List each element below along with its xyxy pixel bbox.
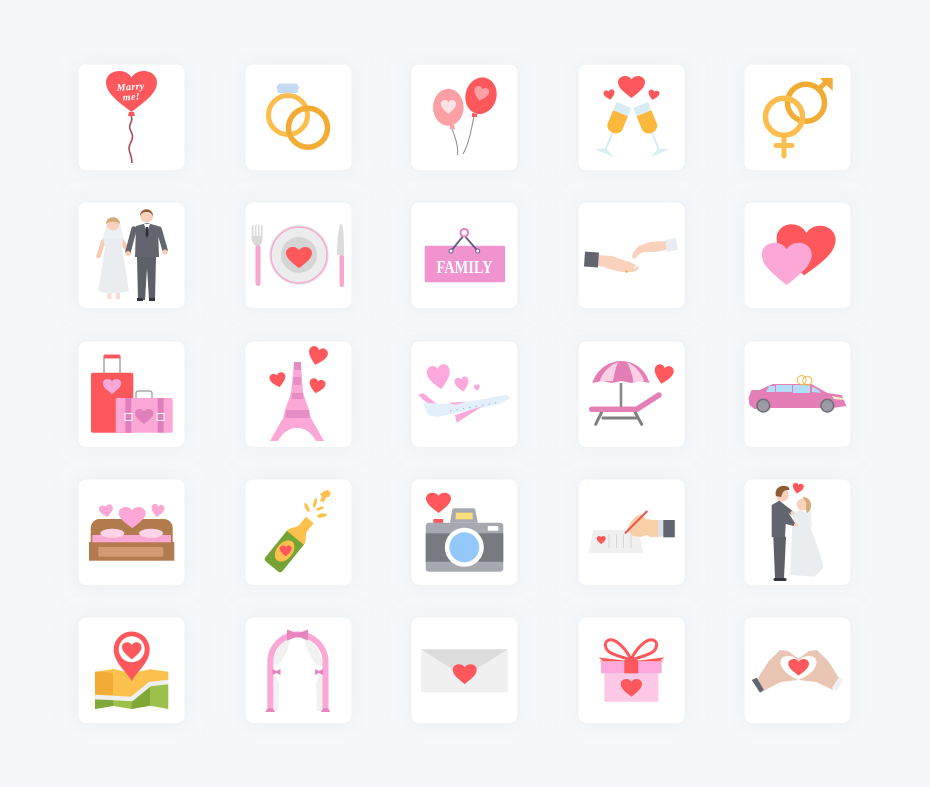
panel: heart hands: [744, 617, 851, 724]
icon: umbrella and sun lounger: [592, 361, 675, 424]
panel: gift box: [578, 617, 685, 724]
icon: gift with bow: [600, 640, 663, 702]
icon: pair of balloons: [433, 74, 501, 155]
icon: interlocked male and female symbols: [766, 78, 833, 156]
icon: groom: [772, 486, 798, 581]
panel: two hearts: [744, 202, 851, 308]
panel: gender symbols: [744, 64, 851, 170]
icon: floating hearts: [269, 345, 329, 395]
panel: champagne bottle: [245, 479, 352, 586]
icon: bed with hearts: [89, 503, 174, 561]
text: FAMILY: FAMILY: [436, 257, 492, 277]
icon: champagne bottle: [263, 513, 318, 573]
icon: hands exchanging ring: [584, 238, 678, 273]
panel: embracing couple: [744, 479, 851, 586]
icon: small heart: [792, 482, 804, 495]
text: Marry me: me!: [122, 91, 140, 104]
icon: heart balloon: [106, 71, 157, 163]
panel: balloons: [411, 64, 518, 170]
panel: map pin: [78, 617, 185, 724]
panel: bed: [78, 479, 185, 586]
panel: wedding arch: [245, 617, 352, 724]
panel: bride and groom: [78, 202, 185, 308]
icon: cork and splash: [303, 490, 331, 518]
panel: luggage: [78, 341, 185, 448]
icon: red suitcase: [91, 354, 133, 433]
icon: groom: [126, 209, 168, 301]
panel: signing document: [578, 479, 685, 586]
panel: love letter: [411, 617, 518, 724]
icon: envelope with heart: [421, 649, 508, 692]
panel: limousine: [744, 341, 851, 448]
panel: champagne toast: [578, 64, 685, 170]
icon: plate with heart and cutlery: [252, 224, 344, 287]
icon: arch with curtains: [266, 630, 330, 712]
icon: bride: [98, 217, 129, 299]
icon: hands forming heart: [752, 650, 843, 693]
icon: location pin with heart: [114, 632, 150, 682]
panel: ring exchange: [578, 202, 685, 308]
panel: camera: [411, 479, 518, 586]
panel: eiffel tower: [245, 341, 352, 448]
icon: hand signing paper: [588, 511, 675, 553]
panel: wedding rings: [245, 64, 352, 170]
panel: family sign: [411, 202, 518, 308]
icon: folded map: [95, 669, 168, 709]
panel: beach lounger: [578, 341, 685, 448]
icon: two rings: [268, 84, 328, 147]
icon: camera with heart: [426, 493, 503, 572]
icon: overlapping hearts: [762, 224, 836, 285]
icon: airplane with hearts: [418, 363, 511, 423]
text: Marry me: Marry: [115, 81, 145, 94]
panel: marry me balloon: [78, 64, 185, 170]
icon: bride: [790, 497, 823, 577]
icon: pink limousine with rings: [748, 376, 846, 412]
icon: hearts above glasses: [595, 76, 670, 157]
panel: dinner plate: [245, 202, 352, 308]
panel: airplane: [411, 341, 518, 448]
icon: eiffel tower: [270, 362, 324, 441]
icon: pink suitcase: [116, 391, 173, 433]
